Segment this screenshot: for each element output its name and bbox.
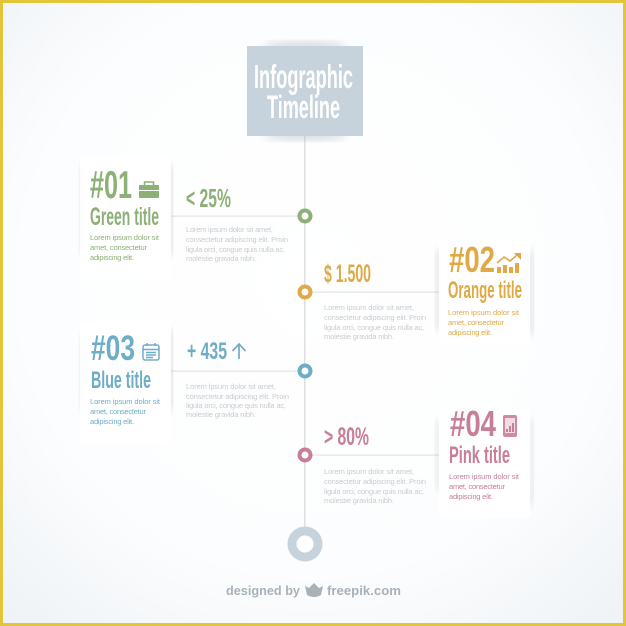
body text 02: consectetur adipiscing elit. Proin [324,313,426,322]
icon: growth chart [497,253,521,273]
connector line 03 [171,370,299,372]
card 03: amet, consectetur [90,407,146,416]
body text 04: molestie gravida nibh. [324,496,394,505]
body text 03: consectetur adipiscing elit. Proin [186,392,289,401]
body text 04: ligula orci, congue quis nulla ac, [324,487,424,496]
card 01: Lorem ipsum dolor sit [90,233,160,242]
header: infographic timeline: Timeline [267,89,340,125]
card 03 [80,322,172,445]
body text 02: Lorem ipsum dolor sit amet, [324,303,414,312]
card 02: Lorem ipsum dolor sit [448,308,520,317]
card 04: Pink title [449,442,510,469]
metric: +435 up: + 435 [187,338,227,365]
footer credit: freepik.com [327,583,401,598]
card 04: amet, consectetur [449,482,506,491]
card 03: adipiscing elit. [90,417,134,426]
card 02: #02 [449,239,495,280]
body text 02: molestie gravida nibh. [324,332,394,341]
metric: $ 1.500: $ 1.500 [324,260,371,288]
body text 02: ligula orci, congue quis nulla ac, [324,323,424,332]
icon: phone chart [503,415,517,437]
card 01: Green title [90,203,159,231]
card 02: amet, consectetur [448,318,504,327]
body text 01: molestie gravida nibh. [186,254,256,263]
step 04: pink [300,403,533,518]
icon: up arrow [232,344,246,359]
connector line 01 [171,216,299,217]
icon: calendar [143,343,159,360]
node 03 [300,366,310,376]
step 02: orange [300,238,533,346]
header: infographic timeline [247,42,363,140]
body text 01: Lorem ipsum dolor sit amet, [186,225,273,234]
icon: freepik crown [305,583,323,597]
step 01: green [80,155,310,280]
card 01: amet, consectetur [90,243,148,252]
node 02 [300,286,310,298]
connector line 04 [311,454,441,456]
body text 03: molestie gravida nibh. [186,410,256,419]
connector line 02 [311,292,441,293]
node 04 [300,450,310,460]
card 01 [80,155,172,280]
footer credit: designed by [226,583,301,598]
body text 01: ligula orci, congue quis nulla ac, [186,245,285,254]
body text 01: consectetur adipiscing elit. Proin [186,235,288,244]
timeline end ring [292,531,318,557]
card 02: adipiscing elit. [448,328,492,337]
card 04: adipiscing elit. [449,492,493,501]
card 03: Lorem ipsum dolor sit [90,397,161,406]
body text 04: consectetur adipiscing elit. Proin [324,477,426,486]
footer credit [226,583,401,598]
card 02: Orange title [448,277,522,304]
body text 03: Lorem ipsum dolor sit amet, [186,382,276,391]
icon: briefcase [139,182,159,198]
card 04: Lorem ipsum dolor sit [449,472,520,481]
card 03: #03 [91,329,135,368]
metric: more than 80%: > 80% [324,423,369,451]
card 04 [436,403,533,518]
card 04: #04 [450,403,496,444]
body text 03: ligula orci, congue quis nulla ac, [186,401,286,410]
header: infographic timeline: Infographic [254,58,353,95]
metric: less than 25%: < 25% [186,183,231,213]
card 02 [436,238,533,346]
card 01: adipiscing elit. [90,253,134,262]
body text 04: Lorem ipsum dolor sit amet, [324,467,414,476]
timeline vertical line [304,136,306,531]
node 01 [300,210,310,222]
card 03: Blue title [91,367,151,394]
card 01: #01 [90,164,132,207]
step 03: blue [80,322,310,445]
